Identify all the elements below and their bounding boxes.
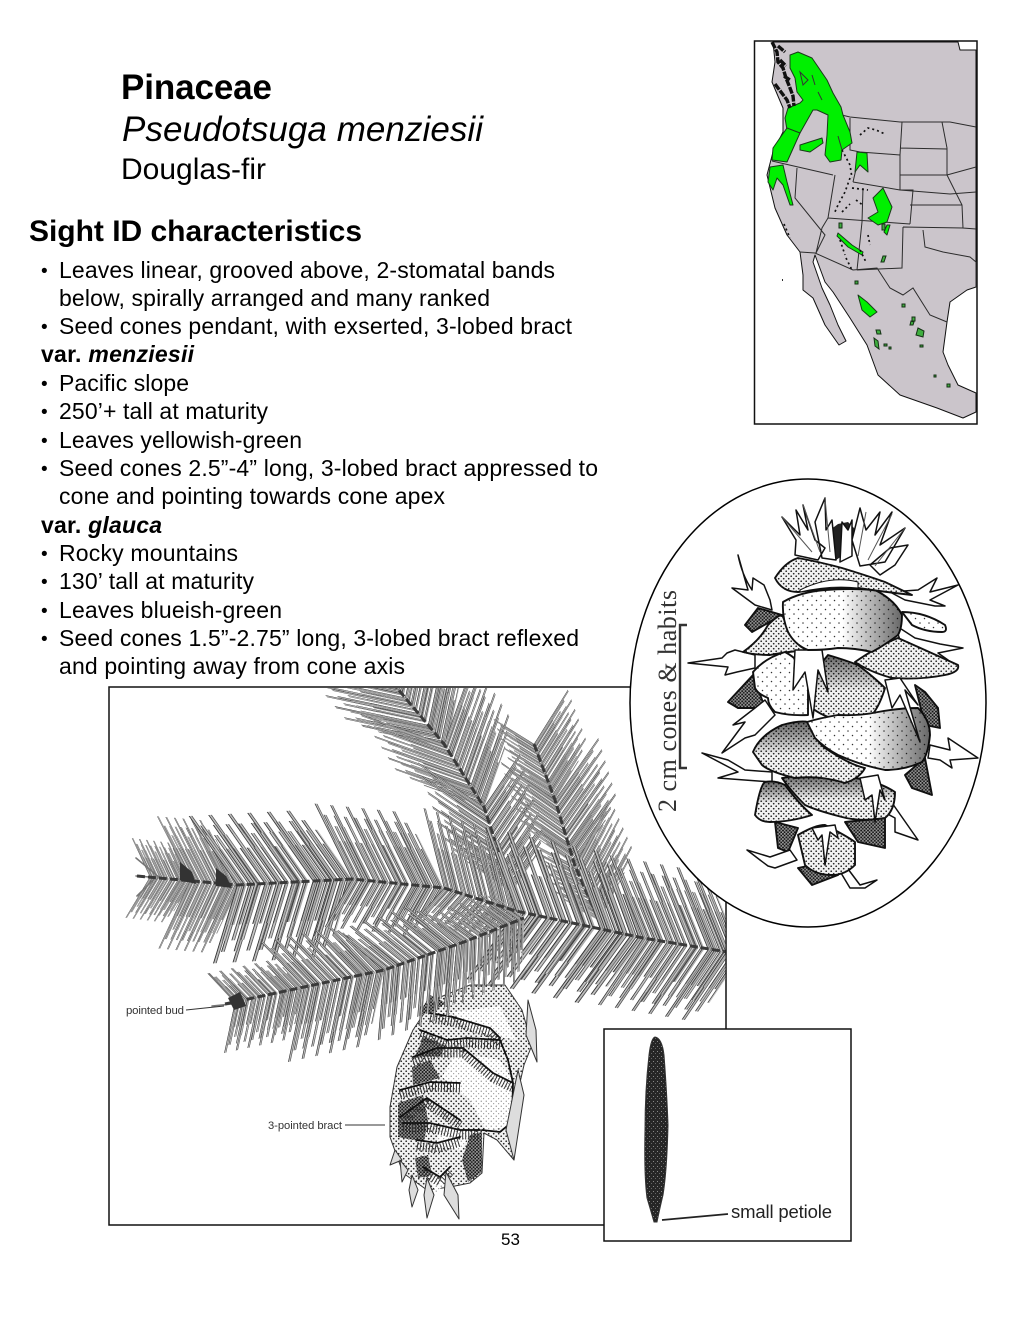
scale bar <box>680 625 687 768</box>
characteristics text block: cone and pointing towards cone apex <box>59 483 446 509</box>
characteristics text block: • <box>41 572 48 593</box>
label: 3-pointed bract <box>268 1120 385 1132</box>
scale J: bottom <box>798 825 855 875</box>
characteristics text block <box>41 257 598 679</box>
icon: leaf silhouette <box>645 1037 668 1222</box>
scale B: right <box>855 638 958 679</box>
scale D: middle left <box>753 652 808 715</box>
center bracts <box>793 650 828 718</box>
state and country borders <box>772 105 976 322</box>
characteristics text block: • <box>41 374 48 395</box>
Douglas-fir range: green areas <box>768 52 950 387</box>
characteristics text block: • <box>41 629 48 650</box>
leaf inset panel <box>604 1029 851 1241</box>
label: pointed bud <box>126 1005 224 1017</box>
cone bottom bract spikes <box>390 1000 537 1219</box>
characteristics text block: var. menziesii <box>41 341 195 367</box>
section heading: Sight ID characteristics <box>29 215 362 248</box>
cone scale ridges <box>400 1013 513 1177</box>
characteristics text block: • <box>41 544 48 565</box>
scale F: big right <box>807 708 930 770</box>
family name: Pinaceae <box>121 68 272 107</box>
scale A: left upper <box>743 615 808 655</box>
top crown bracts <box>782 498 908 575</box>
characteristics text block: • <box>41 459 48 480</box>
common name: Douglas-fir <box>121 153 266 186</box>
scale 2: large top <box>783 589 902 652</box>
label: 3-pointed bract: 3-pointed bract <box>268 1120 343 1132</box>
characteristics text block: and pointing away from cone axis <box>59 653 405 679</box>
characteristics text block: Seed cones pendant, with exserted, 3-lobed bract <box>59 313 573 339</box>
species name: Pseudotsuga menziesii <box>122 110 484 149</box>
dark back scales <box>728 608 940 885</box>
branch illustration panel <box>109 639 733 1225</box>
characteristics text block: 250’+ tall at maturity <box>59 398 268 424</box>
characteristics text block: Seed cones 1.5”-2.75” long, 3-lobed bract reflexed <box>59 625 579 651</box>
upper branches <box>345 639 617 921</box>
range map panel <box>754 41 977 424</box>
scale bar label: 2 cm cones & habits <box>653 590 682 812</box>
side bracts <box>688 555 978 888</box>
characteristics text block: Leaves yellowish-green <box>59 427 302 453</box>
scale G: big left <box>753 721 865 783</box>
label: pointed bud: pointed bud <box>126 1005 184 1017</box>
scale E: middle center <box>812 655 885 720</box>
coastal dark band <box>772 42 794 108</box>
characteristics text block: • <box>41 431 48 452</box>
scale 1: top rim <box>775 558 912 595</box>
characteristics text block: Pacific slope <box>59 370 189 396</box>
branch twigs <box>137 862 727 1010</box>
page number: 53 <box>501 1230 520 1249</box>
characteristics text block: below, spirally arranged and many ranked <box>59 285 490 311</box>
title block <box>121 68 484 186</box>
cone scale hatching <box>400 1018 513 1182</box>
leader line <box>662 1214 728 1220</box>
characteristics text block: • <box>41 261 48 282</box>
scale C: upper right small <box>902 612 946 632</box>
lower branch needles <box>209 904 524 1027</box>
main branch needles <box>136 841 733 989</box>
cone light scales <box>430 1006 516 1192</box>
characteristics text block: Leaves blueish-green <box>59 597 282 623</box>
characteristics text block: Rocky mountains <box>59 540 238 566</box>
characteristics text block: • <box>41 601 48 622</box>
scale I: lower left <box>755 781 812 822</box>
characteristics text block: • <box>41 317 48 338</box>
map land area <box>767 42 976 418</box>
characteristics text block: 130’ tall at maturity <box>59 568 254 594</box>
seed cone drawing <box>390 985 537 1219</box>
cone shading <box>398 995 482 1182</box>
scale H: lower <box>782 775 895 820</box>
characteristics text block: Seed cones 2.5”-4” long, 3-lobed bract appressed to <box>59 455 598 481</box>
characteristics text block: • <box>41 402 48 423</box>
cone closeup oval <box>630 479 986 927</box>
cone drawing <box>688 498 978 888</box>
characteristics text block: var. glauca <box>41 512 162 538</box>
small petiole label: small petiole <box>731 1201 832 1222</box>
characteristics text block: Leaves linear, grooved above, 2-stomatal bands <box>59 257 555 283</box>
scattered black range dots <box>782 128 885 280</box>
